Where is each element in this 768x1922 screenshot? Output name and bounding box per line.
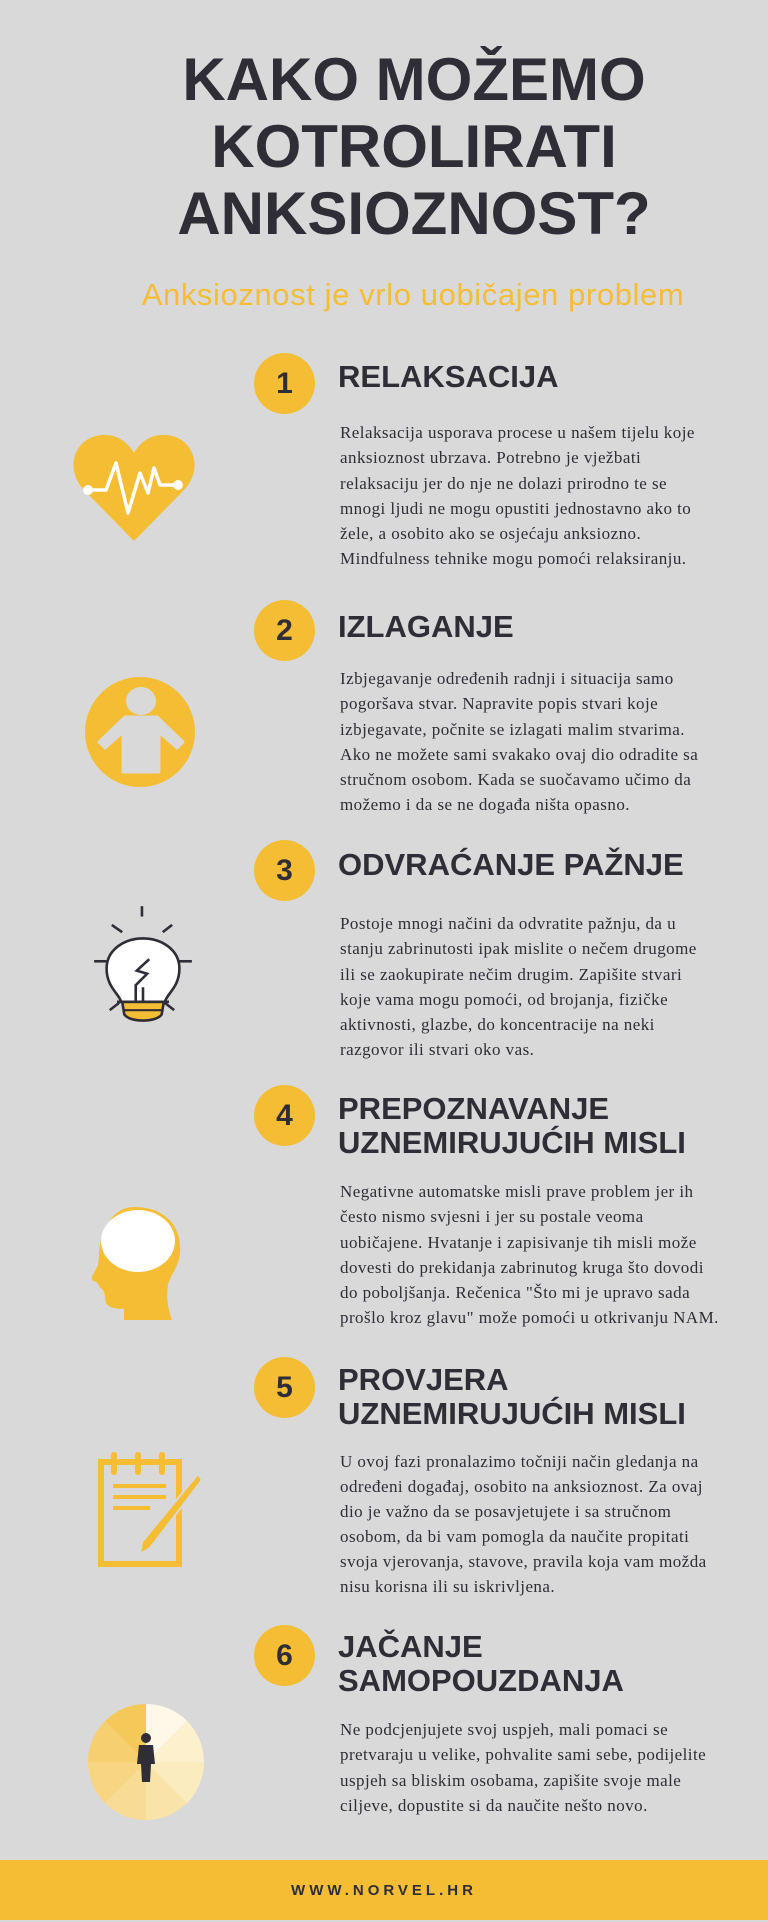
body 2: pogoršava stvar. Napravite popis stvari koje — [340, 694, 658, 713]
number circle 3: 3 — [276, 854, 293, 887]
body 2: Izbjegavanje određenih radnji i situacija samo — [340, 669, 674, 688]
body 1 — [340, 423, 695, 568]
icon: person in circle — [85, 677, 195, 787]
body 3: koje vama mogu pomoći, od brojanja, fizičke — [340, 990, 668, 1009]
number circle 5: 5 — [276, 1371, 293, 1404]
body 1: žele, a osobito ako se osjećaju anksiozno. — [340, 524, 641, 543]
body 6: uspjeh sa bliskim osobama, zapišite svoje male — [340, 1771, 681, 1790]
icon: light bulb — [94, 906, 192, 1022]
body 5: određeni događaj, osobito na anksioznost. Za ovaj — [340, 1477, 703, 1496]
body 4: do poboljšanja. Rečenica "Što mi je upravo sada — [340, 1283, 690, 1302]
body 6: Ne podcjenjujete svoj uspjeh, mali pomaci se — [340, 1720, 668, 1739]
footer: WWW.NORVEL.HR — [291, 1882, 477, 1899]
number circle 4 — [254, 1085, 315, 1146]
heading 4: UZNEMIRUJUĆIH MISLI — [338, 1125, 686, 1160]
body 5 — [340, 1452, 707, 1596]
body 2: možemo i da se ne događa ništa opasno. — [340, 795, 630, 814]
heading 5: UZNEMIRUJUĆIH MISLI — [338, 1396, 686, 1431]
body 1: anksioznost ubrzava. Potrebno je vježbati — [340, 448, 641, 467]
number circle 6: 6 — [276, 1639, 293, 1672]
body 2 — [340, 669, 698, 814]
body 4: često nismo svjesni i jer su postale veoma — [340, 1207, 644, 1226]
heading 4 — [338, 1091, 686, 1160]
body 2: izbjegavate, počnite se izlagati malim stvarima. — [340, 720, 685, 739]
body 1: mnogi ljudi ne mogu opustiti jednostavno ako to — [340, 499, 691, 518]
icon: notepad and pencil — [98, 1452, 201, 1567]
heading 2: IZLAGANJE — [338, 609, 514, 644]
body 6: pretvaraju u velike, pohvalite sami sebe, podijelite — [340, 1745, 706, 1764]
body 4: Negativne automatske misli prave problem jer ih — [340, 1182, 694, 1201]
title: KOTROLIRATI — [211, 113, 617, 180]
body 2: stručnom osobom. Kada se suočavamo učimo da — [340, 770, 691, 789]
icon: sun wheel with person — [88, 1704, 204, 1820]
body 4: prošlo kroz glavu" može pomoći u otkrivanju NAM. — [340, 1308, 719, 1327]
number circle 1: 1 — [276, 367, 293, 400]
body 3: stanju zabrinutosti ipak mislite o nečem drugome — [340, 939, 697, 958]
title: ANKSIOZNOST? — [177, 180, 651, 247]
body 5: dio je važno da se posavjetujete i sa stručnom — [340, 1502, 671, 1521]
heading 3: ODVRAĆANJE PAŽNJE — [338, 847, 684, 882]
number circle 2 — [254, 600, 315, 661]
body 3: aktivnosti, glazbe, do koncentracije na neki — [340, 1015, 655, 1034]
body 3: ili se zaokupirate nečim drugim. Zapišite stvari — [340, 965, 682, 984]
heading 6: JAČANJE — [338, 1629, 483, 1664]
footer — [0, 1860, 768, 1920]
subtitle: Anksioznost je vrlo uobičajen problem — [142, 277, 684, 312]
body 3: Postoje mnogi načini da odvratite pažnju, da u — [340, 914, 676, 933]
heading 6 — [338, 1629, 624, 1698]
body 4: dovesti do prekidanja zabrinutog kruga što dovodi — [340, 1258, 704, 1277]
body 6 — [340, 1720, 706, 1815]
body 5: nisu korisna ili su iskrivljena. — [340, 1577, 555, 1596]
body 5: U ovoj fazi pronalazimo točniji način gledanja na — [340, 1452, 699, 1471]
number circle 3 — [254, 840, 315, 901]
body 4 — [340, 1182, 719, 1327]
number circle 2: 2 — [276, 614, 293, 647]
icon: heart — [74, 434, 194, 541]
body 5: svoja vjerovanja, stavove, pravila koja vam možda — [340, 1552, 707, 1571]
heading 4: PREPOZNAVANJE — [338, 1091, 609, 1126]
title — [177, 46, 651, 247]
body 1: Mindfulness tehnike mogu pomoći relaksiranju. — [340, 549, 686, 568]
title: KAKO MOŽEMO — [182, 46, 646, 113]
number circle 1 — [254, 353, 315, 414]
icon: head with thought — [92, 1207, 180, 1320]
heading 5 — [338, 1362, 686, 1431]
body 1: relaksaciju jer do nje ne dolazi prirodno te se — [340, 474, 667, 493]
body 5: osobom, da bi vam pomogla da naučite propitati — [340, 1527, 689, 1546]
number circle 4: 4 — [276, 1099, 293, 1132]
body 1: Relaksacija usporava procese u našem tijelu koje — [340, 423, 695, 442]
heading 5: PROVJERA — [338, 1362, 509, 1397]
number circle 6 — [254, 1625, 315, 1686]
heading 6: SAMOPOUZDANJA — [338, 1663, 624, 1698]
body 3 — [340, 914, 697, 1059]
body 6: ciljeve, dopustite si da naučite nešto novo. — [340, 1796, 648, 1815]
body 4: uobičajene. Hvatanje i zapisivanje tih misli može — [340, 1233, 697, 1252]
number circle 5 — [254, 1357, 315, 1418]
heading 1: RELAKSACIJA — [338, 359, 558, 394]
body 3: razgovor ili stvari oko vas. — [340, 1040, 534, 1059]
body 2: Ako ne možete sami svakako ovaj dio odradite sa — [340, 745, 698, 764]
